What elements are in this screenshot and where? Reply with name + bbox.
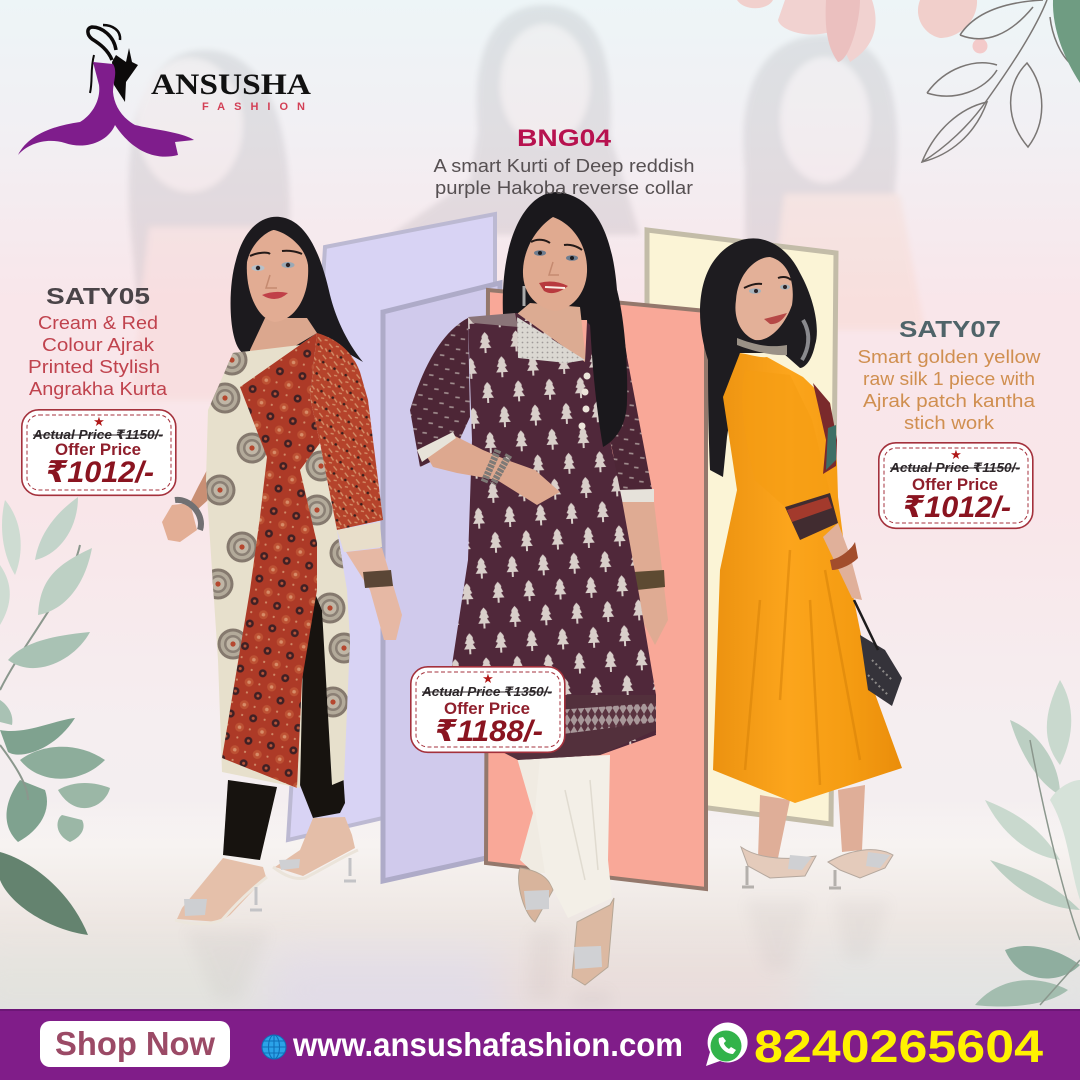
shoes xyxy=(741,847,816,878)
price tag: BNG04: ₹1188/- xyxy=(435,715,543,748)
product: SATY07 text xyxy=(858,316,1042,433)
panel: front lavender translucent xyxy=(383,283,500,881)
sleeve cuff xyxy=(337,522,382,552)
face xyxy=(523,217,587,311)
price tag: SATY07: ₹1012/- xyxy=(903,491,1011,524)
bottom bar xyxy=(0,1009,1080,1080)
kurta body xyxy=(450,313,656,760)
hem border xyxy=(450,695,656,760)
pants front leg xyxy=(535,755,612,918)
price tag: SATY05: ★ xyxy=(93,414,105,429)
product: SATY05 text xyxy=(28,283,168,399)
price tag: SATY07: Actual Price ₹1150/- xyxy=(889,460,1020,475)
forearm right xyxy=(346,548,402,640)
product: BNG04 text: purple Hakoba reverse collar xyxy=(435,178,693,198)
panel: back yellow xyxy=(647,230,836,824)
panel: back lavender xyxy=(288,214,495,840)
far arm behind xyxy=(190,470,208,510)
ghost portrait: right xyxy=(743,35,925,330)
logo xyxy=(18,25,311,157)
outlined sprig xyxy=(922,0,1072,162)
product: SATY05 text: Printed Stylish xyxy=(28,357,160,377)
website: www.ansushafashion.com xyxy=(292,1026,683,1063)
button: shop now xyxy=(40,1021,230,1067)
placket buttons xyxy=(578,372,590,430)
backdrop panels xyxy=(288,214,836,889)
decorative leaves: top right xyxy=(737,0,1080,162)
product: SATY07 text: raw silk 1 piece with xyxy=(863,369,1035,389)
product: BNG04 text: BNG04 xyxy=(517,125,612,152)
sleeve left xyxy=(410,318,470,467)
sleeve xyxy=(310,333,383,530)
arm right xyxy=(620,502,668,645)
hair over shoulder xyxy=(587,290,627,447)
model right: SATY07 xyxy=(700,238,902,888)
product: SATY07 text: SATY07 xyxy=(899,316,1001,342)
back foot and shoe xyxy=(519,868,553,922)
logo mark: figure with gown xyxy=(18,25,194,157)
sleeve right xyxy=(605,340,654,500)
price tag: BNG04: ★ xyxy=(482,671,494,686)
hand and bangles left xyxy=(162,503,197,542)
product: BNG04 text: A smart Kurti of Deep reddish xyxy=(434,156,694,176)
price tag: SATY05: Offer Price xyxy=(55,440,141,459)
phone number: 8240265604 xyxy=(754,1021,1043,1072)
ghost portraits in background xyxy=(129,5,925,400)
price tag: BNG04 xyxy=(411,667,565,752)
price tag: SATY07 xyxy=(879,443,1033,528)
product: SATY05 text: Angrakha Kurta xyxy=(29,379,168,399)
decorative leaves: left xyxy=(0,497,110,935)
model centre: BNG04 xyxy=(410,192,668,985)
button: shop now: Shop Now xyxy=(55,1025,215,1062)
floor xyxy=(0,800,1080,1030)
product: SATY07 text: Smart golden yellow xyxy=(858,347,1042,367)
logo wordmark: ANSUSHA xyxy=(151,68,311,101)
kurta cream body xyxy=(206,333,350,788)
price tag: SATY07: Offer Price xyxy=(912,475,998,494)
roundel prints xyxy=(206,352,350,718)
icon: globe xyxy=(262,1035,286,1059)
cuff xyxy=(417,432,456,462)
product: SATY07 text: stich work xyxy=(904,413,995,433)
face and neck xyxy=(250,318,317,373)
hair xyxy=(231,217,363,362)
ghost portrait: centre xyxy=(390,5,640,235)
collar xyxy=(517,317,585,363)
price tag: BNG04: Offer Price xyxy=(444,699,530,718)
earring xyxy=(522,286,526,306)
neckline patch xyxy=(813,383,837,474)
icon: whatsapp xyxy=(706,1023,748,1066)
product: SATY05 text: Colour Ajrak xyxy=(42,335,155,355)
model left: SATY05 xyxy=(162,217,402,924)
product: BNG04 text xyxy=(434,125,694,198)
near foot and shoe xyxy=(177,858,266,922)
front foot and shoe xyxy=(572,898,614,985)
far foot and shoe xyxy=(275,817,355,876)
dress xyxy=(713,353,902,803)
product: SATY07 text: Ajrak patch kantha xyxy=(863,391,1036,411)
kurta red panel xyxy=(222,333,320,788)
choker xyxy=(737,338,787,355)
hair xyxy=(700,238,817,477)
ghost portrait: left xyxy=(129,50,290,400)
price tag: SATY05 xyxy=(22,410,176,495)
decorative leaves: bottom right xyxy=(975,680,1080,1006)
yoke xyxy=(468,313,518,327)
arm and bangles xyxy=(823,523,862,600)
handbag xyxy=(860,635,902,706)
arm and hand at waist xyxy=(423,435,560,505)
bangles xyxy=(484,450,509,484)
pants back leg xyxy=(517,758,568,875)
pants far leg, behind kurta xyxy=(298,560,345,818)
solid leaf xyxy=(1053,0,1080,83)
logo tagline: FASHION xyxy=(202,101,305,113)
price tag: SATY05: Actual Price ₹1150/- xyxy=(32,427,163,442)
neck xyxy=(517,303,586,362)
hair behind xyxy=(503,192,627,440)
price tag: SATY07: ★ xyxy=(950,447,962,462)
face xyxy=(735,257,793,340)
product: SATY05 text: Cream & Red xyxy=(38,313,158,333)
panel: coral xyxy=(486,290,706,889)
near leg xyxy=(223,780,277,860)
sleeve patch xyxy=(785,493,838,540)
legs xyxy=(758,795,790,858)
price tag: SATY05: ₹1012/- xyxy=(46,456,154,489)
floor reflections of the models xyxy=(185,900,890,1008)
product: SATY05 text: SATY05 xyxy=(46,283,150,309)
price tag: BNG04: Actual Price ₹1350/- xyxy=(421,684,552,699)
flowers xyxy=(737,0,988,62)
